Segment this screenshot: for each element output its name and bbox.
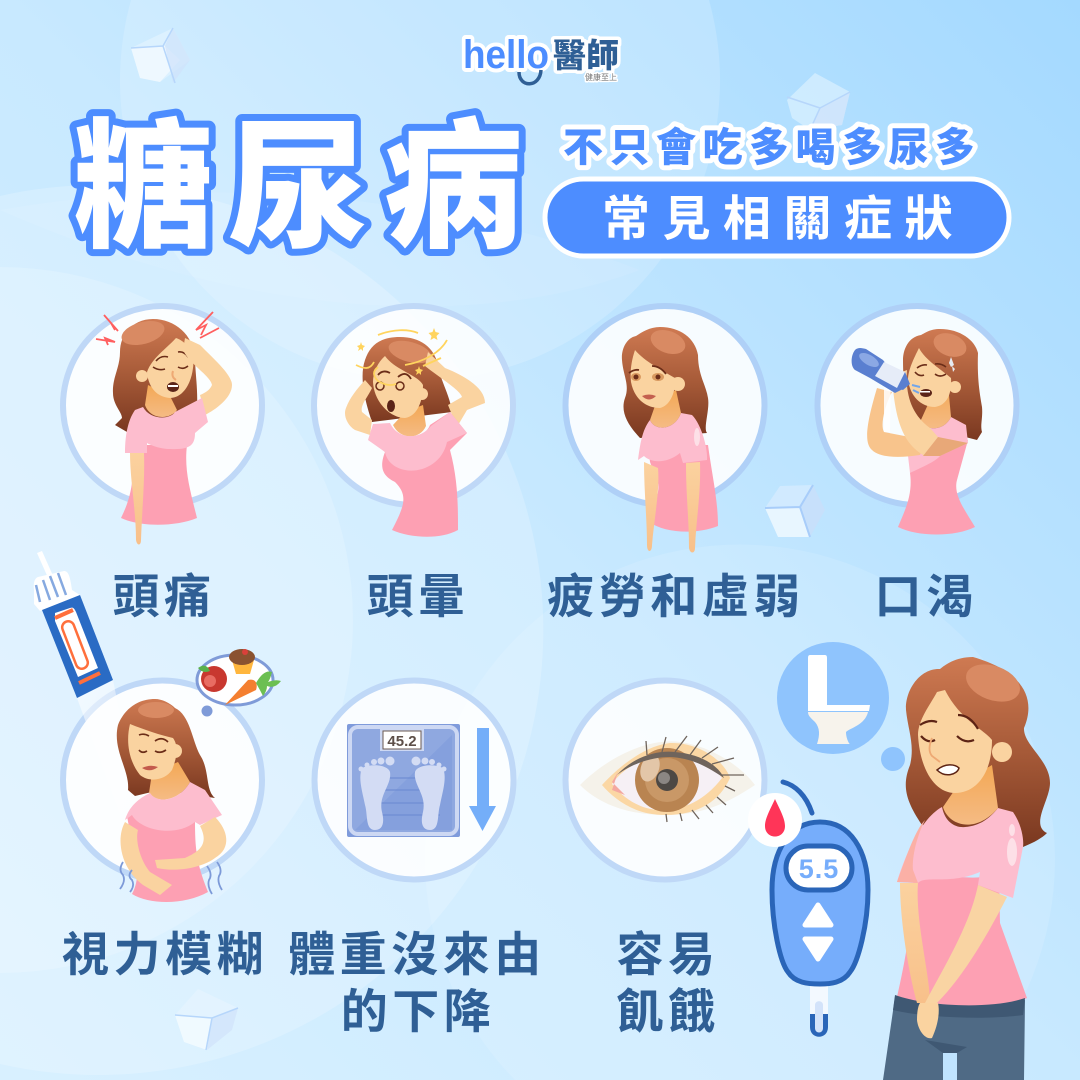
thought bubble: food xyxy=(197,649,281,716)
thought bubble: toilet xyxy=(777,642,905,771)
sugar cube top right xyxy=(787,73,850,130)
label: blurred vision: 視力模糊 xyxy=(62,928,268,981)
figure: thirst xyxy=(852,329,982,534)
label: unexplained weight loss: 體重沒來由 xyxy=(288,928,546,981)
label: thirst: 口渴 xyxy=(874,570,978,623)
label: fatigue: 疲勞和虛弱 xyxy=(547,570,805,623)
scale reading: 45.2 xyxy=(387,733,417,750)
title: 糖尿病 xyxy=(73,109,538,266)
logo: tagline: 健康至上 xyxy=(585,72,617,82)
subtitle: 不只會吃多喝多尿多 xyxy=(563,126,982,170)
arrow: down xyxy=(469,728,496,831)
figure: hungry xyxy=(117,649,281,902)
glucose meter xyxy=(748,782,868,1037)
label: hunger line 1: 容易 xyxy=(616,928,720,981)
logo xyxy=(463,33,619,84)
lancet pen xyxy=(34,551,137,815)
pill heading xyxy=(545,179,1009,256)
circle backdrops xyxy=(63,306,1016,880)
figure: fatigue xyxy=(622,326,718,552)
label: weight loss line 2: 的下降 xyxy=(341,985,495,1038)
meter reading: 5.5 xyxy=(799,854,839,884)
figure: dizzy xyxy=(345,328,485,537)
sugar cube middle right xyxy=(765,485,825,537)
label: headache: 頭痛 xyxy=(112,570,216,623)
figure: frequent urination woman xyxy=(883,657,1050,1080)
figure: eye xyxy=(580,736,755,822)
figure: weight scale xyxy=(347,724,496,837)
logo: hello wordmark: hello xyxy=(463,33,549,77)
label: hunger line 2: 飢餓 xyxy=(616,985,720,1038)
sugar cube top left xyxy=(131,28,190,83)
logo: stethoscope curve xyxy=(519,70,541,84)
pill heading: 常見相關症狀 xyxy=(602,193,965,246)
figure: headache xyxy=(96,312,232,544)
label: dizzy: 頭暈 xyxy=(366,570,470,623)
sugar cube bottom xyxy=(175,989,238,1050)
logo: chinese name: 醫師 xyxy=(553,37,619,74)
